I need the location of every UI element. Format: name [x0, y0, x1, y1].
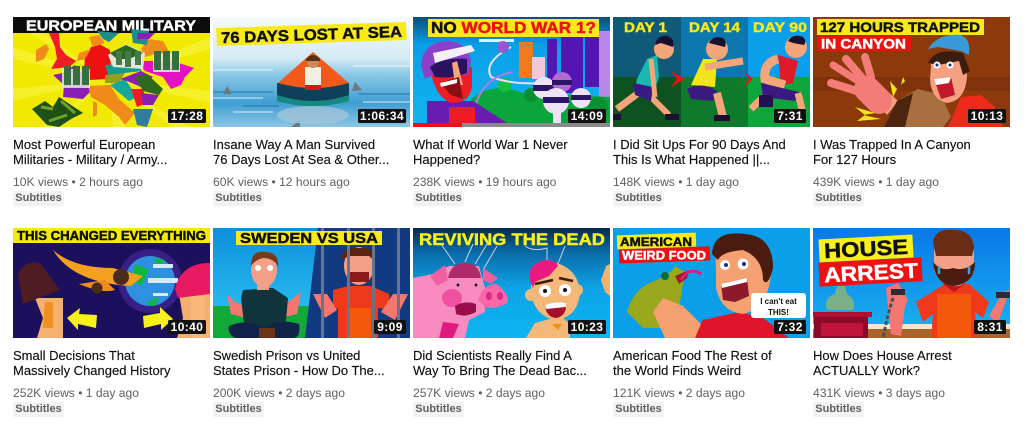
pig — [413, 263, 508, 338]
video title: How Does House Arrest — [813, 348, 952, 363]
hand — [831, 57, 879, 101]
table — [813, 312, 872, 338]
banner: NO WORLD WAR 1? — [431, 20, 596, 37]
video title — [813, 348, 952, 378]
duration: 1:06:34 — [360, 109, 404, 123]
speech bubble — [751, 293, 806, 318]
banners — [818, 235, 923, 287]
thumbnail: prison comparison — [213, 228, 410, 338]
video title: States Prison - How Do The... — [213, 363, 385, 378]
banner: 76 DAYS LOST AT SEA — [221, 24, 402, 47]
video card: European military — [13, 17, 210, 206]
duration: 10:40 — [171, 320, 203, 334]
banners: ARREST — [824, 259, 919, 287]
banners: WEIRD FOOD — [622, 248, 706, 262]
thumbnail: man with frog — [613, 228, 810, 338]
video card: sweden vs usa — [213, 228, 410, 417]
video title: Insane Way A Man Survived — [213, 137, 375, 152]
video card: 127 hours — [813, 17, 1010, 206]
video title: What If World War 1 Never — [413, 137, 568, 152]
thumbnail: man in chains — [813, 228, 1010, 338]
thumbnail: three day panels: DAY 90 — [753, 19, 807, 35]
thumbnail: futuristic city — [413, 17, 610, 127]
video title: I Was Trapped In A Canyon — [813, 137, 971, 152]
video title — [613, 137, 786, 167]
earth — [125, 256, 178, 306]
thumbnail: three day panels: DAY 1 — [624, 19, 667, 35]
duration: 9:09 — [377, 320, 403, 334]
video card: sit ups — [613, 17, 810, 206]
ice cream right — [175, 263, 210, 338]
banners: AMERICAN — [620, 237, 692, 249]
map of Europe — [36, 29, 194, 127]
duration: 7:32 — [777, 320, 803, 334]
thumbnail: European military map: EUROPEAN MILITARY — [26, 18, 196, 34]
subtitles badge: Subtitles — [415, 403, 462, 415]
figure: day 14 — [687, 37, 743, 121]
video title: Most Powerful European — [13, 137, 155, 152]
video title: Did Scientists Really Find A — [413, 348, 572, 363]
subtitles badge: Subtitles — [15, 192, 62, 204]
boy — [525, 260, 610, 338]
subtitles badge: Subtitles — [615, 403, 662, 415]
video title — [613, 348, 772, 378]
video card: house arrest — [813, 228, 1010, 417]
video title: ACTUALLY Work? — [813, 363, 920, 378]
video card: 76 days lost at sea — [213, 17, 410, 206]
thumbnail: three day panels: DAY 14 — [689, 19, 740, 35]
banners: IN CANYON — [821, 36, 906, 52]
video title: Swedish Prison vs United — [213, 348, 360, 363]
duration: 17:28 — [171, 109, 203, 123]
video title: Small Decisions That — [13, 348, 135, 363]
meteors — [53, 250, 143, 294]
thumbnail: life raft at sea — [213, 17, 410, 127]
man — [886, 230, 1010, 338]
duration: 10:13 — [971, 109, 1003, 123]
view count and age: 431K views • 3 days ago — [813, 386, 945, 400]
video title: Massively Changed History — [13, 363, 171, 378]
figure: day 1 — [613, 36, 679, 120]
subtitles badge: Subtitles — [615, 192, 662, 204]
subtitles badge: Subtitles — [415, 192, 462, 204]
chain — [883, 298, 893, 338]
view count and age: 257K views • 2 days ago — [413, 386, 545, 400]
speech bubble: THIS! — [768, 308, 789, 317]
view count and age: 252K views • 1 day ago — [13, 386, 139, 400]
view count and age: 121K views • 2 days ago — [613, 386, 745, 400]
video title: This Is What Happened ||... — [613, 152, 770, 167]
video title: Happened? — [413, 152, 480, 167]
ice cream left — [18, 262, 63, 338]
soldiers and tanks — [32, 44, 180, 127]
banners — [617, 233, 710, 264]
man left — [227, 252, 301, 338]
view count and age: 148K views • 1 day ago — [613, 175, 739, 189]
thumbnail: pig and boy: REVIVING THE DEAD — [419, 231, 605, 249]
figure: day 90 — [751, 36, 807, 113]
duration: 10:23 — [571, 320, 603, 334]
banners — [817, 19, 984, 52]
thumbnail: trapped in canyon — [813, 17, 1010, 127]
view count and age: 238K views • 19 hours ago — [413, 175, 556, 189]
video title — [413, 348, 587, 378]
video title: 76 Days Lost At Sea & Other... — [213, 152, 389, 167]
thumbnail: pig and boy — [413, 228, 610, 338]
view count and age: 439K views • 1 day ago — [813, 175, 939, 189]
duration: 8:31 — [977, 320, 1003, 334]
banners: HOUSE — [824, 236, 909, 263]
video card: small decisions — [13, 228, 210, 417]
subtitles badge: Subtitles — [815, 192, 862, 204]
man right — [313, 247, 408, 338]
subtitles badge: Subtitles — [15, 403, 62, 415]
subtitles badge: Subtitles — [815, 403, 862, 415]
video title: the World Finds Weird — [613, 363, 741, 378]
video title — [813, 137, 971, 167]
video title: I Did Sit Ups For 90 Days And — [613, 137, 786, 152]
duration: 14:09 — [571, 109, 603, 123]
video title: Way To Bring The Dead Bac... — [413, 363, 587, 378]
frog — [627, 266, 701, 328]
video title: American Food The Rest of — [613, 348, 772, 363]
video title: Militaries - Military / Army... — [13, 152, 167, 167]
thumbnail: space and ice cream: THIS CHANGED EVERYTHING — [17, 229, 206, 243]
video card: no world war 1 — [413, 17, 610, 206]
thumbnail: three day panels — [613, 17, 810, 127]
video title — [213, 137, 389, 167]
video title — [213, 348, 385, 378]
view count and age: 10K views • 2 hours ago — [13, 175, 143, 189]
subtitles badge: Subtitles — [215, 403, 262, 415]
banners: 127 HOURS TRAPPED — [820, 19, 980, 35]
video title — [13, 137, 167, 167]
video card: american food — [613, 228, 810, 417]
vase — [826, 286, 854, 310]
video title: For 127 Hours — [813, 152, 896, 167]
thumbnail: European military map — [13, 17, 210, 127]
duration: 7:31 — [777, 109, 803, 123]
view count and age: 60K views • 12 hours ago — [213, 175, 350, 189]
banner: SWEDEN VS USA — [240, 231, 379, 247]
video card: reviving the dead — [413, 228, 610, 417]
view count and age: 200K views • 2 days ago — [213, 386, 345, 400]
subtitles badge: Subtitles — [215, 192, 262, 204]
thumbnail: space and ice cream — [13, 228, 210, 338]
video title — [413, 137, 568, 167]
video title — [13, 348, 171, 378]
speech bubble: I can't eat — [760, 297, 797, 306]
